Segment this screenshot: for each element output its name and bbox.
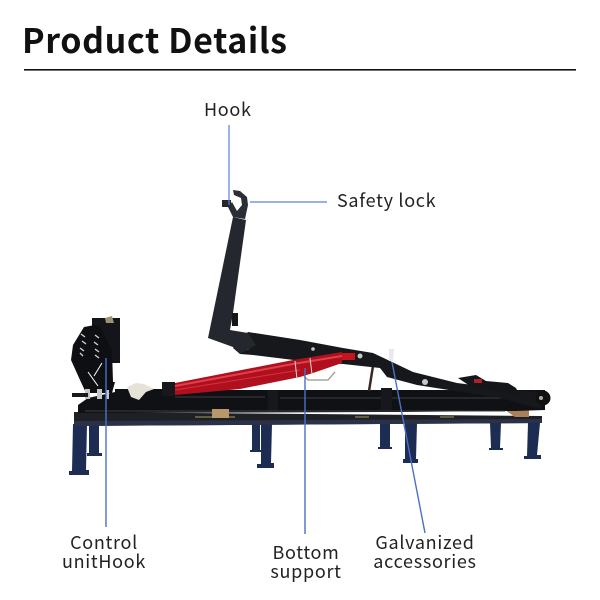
leader line: hook bbox=[228, 125, 230, 205]
label: galvanized accessories: accessories bbox=[373, 548, 477, 574]
hook side latch bbox=[222, 200, 231, 207]
rag bbox=[127, 383, 154, 400]
leader line: bottom support bbox=[304, 368, 306, 534]
arm end roller hub bbox=[539, 396, 543, 400]
upright arm bracket bbox=[232, 313, 238, 326]
label: galvanized accessories: Galvanized bbox=[375, 529, 475, 555]
hook bbox=[228, 190, 248, 219]
label: safety lock: Safety lock bbox=[337, 187, 436, 213]
wooden block bbox=[212, 409, 229, 418]
leader line: safety lock bbox=[250, 201, 327, 203]
title underline bbox=[24, 69, 576, 71]
red cylinder bbox=[175, 352, 355, 395]
small cylinder on arm bbox=[458, 375, 520, 396]
control unit bbox=[71, 316, 120, 399]
wooden block right bbox=[505, 410, 529, 417]
white tag bbox=[389, 349, 394, 361]
upright arm bbox=[208, 217, 256, 354]
table legs bbox=[69, 423, 541, 475]
stay rod bbox=[369, 366, 373, 391]
label: control unit: Control bbox=[70, 529, 138, 555]
label: bottom support: support bbox=[270, 558, 342, 584]
base rail bbox=[78, 389, 545, 413]
label: bottom support: Bottom bbox=[272, 539, 340, 565]
light patches on table bbox=[195, 416, 454, 418]
table top bbox=[74, 412, 542, 426]
leader line: galvanized accessories bbox=[392, 362, 425, 533]
leader line: control unit bbox=[105, 358, 107, 527]
arm pivot details bbox=[245, 346, 428, 385]
title: Product Details bbox=[22, 14, 288, 63]
arm end roller bbox=[536, 390, 550, 406]
lower arm bbox=[233, 332, 548, 408]
label: control unit: unitHook bbox=[62, 548, 146, 574]
rail highlights bbox=[85, 397, 540, 411]
hook-lift machine illustration bbox=[69, 190, 550, 475]
label: hook: Hook bbox=[204, 96, 252, 122]
red fitting bbox=[474, 379, 482, 383]
rail brackets bbox=[162, 382, 392, 410]
